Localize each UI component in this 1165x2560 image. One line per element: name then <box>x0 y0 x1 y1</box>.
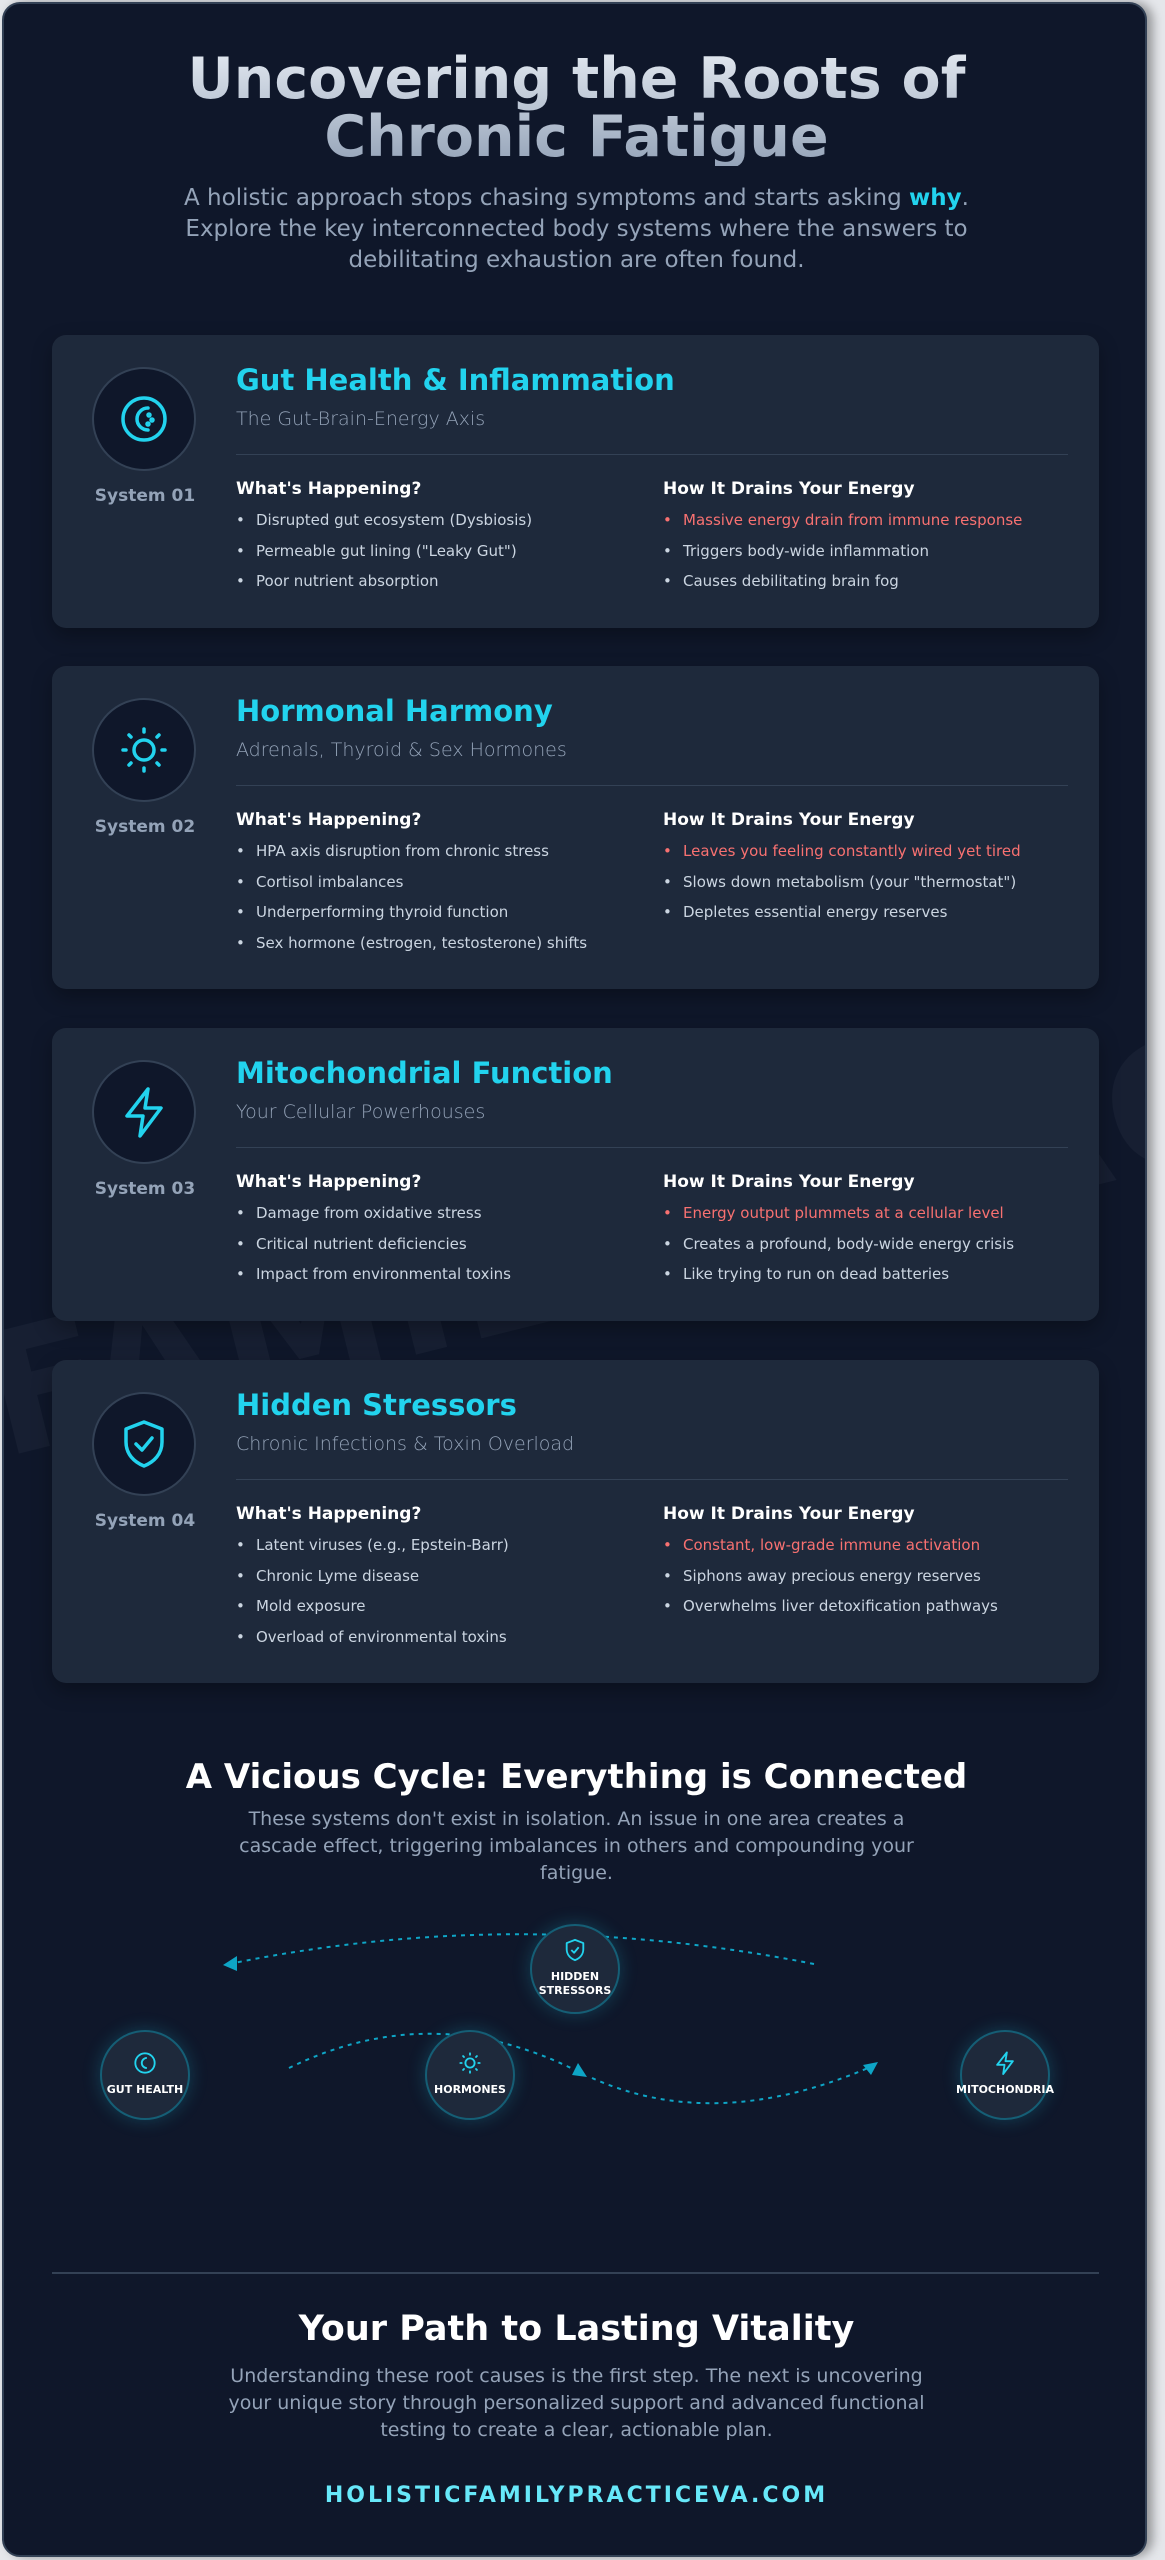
node: hormones: HORMONES <box>434 2083 506 2096</box>
panel: hidden stressors <box>52 1360 1099 1683</box>
node: hidden stressors: HIDDEN <box>551 1970 599 1983</box>
panel: gut health: The Gut-Brain-Energy Axis <box>236 408 485 430</box>
list: what's happening: What's Happening? <box>236 479 421 499</box>
title <box>4 50 1149 166</box>
icon: shield <box>92 1392 196 1496</box>
list: what's happening: Permeable gut lining ("Leaky Gut") <box>256 542 517 560</box>
node: gut health: GUT HEALTH <box>107 2083 183 2096</box>
subtitle: A holistic approach stops chasing symptoms and starts asking why. <box>184 185 969 211</box>
list: what's happening: Cortisol imbalances <box>256 872 403 890</box>
heading: Mitochondrial Function <box>236 1056 613 1090</box>
panel: hormones: System 02 <box>95 817 195 837</box>
title: Uncovering the Roots of <box>187 46 966 112</box>
list: energy drain: Causes debilitating brain fog <box>683 572 899 590</box>
list: what's happening: Damage from oxidative stress <box>256 1204 482 1222</box>
list: energy drain: Massive energy drain from immune response <box>683 511 1022 529</box>
panel: gut health: System 01 <box>95 486 195 506</box>
list: what's happening <box>236 1172 511 1283</box>
list: what's happening: Overload of environmental toxins <box>256 1628 507 1646</box>
subtitle <box>184 185 969 273</box>
node: hidden stressors: STRESSORS <box>539 1984 611 1997</box>
list: what's happening: Latent viruses (e.g., Epstein-Barr) <box>256 1536 509 1554</box>
panel: gut health <box>52 335 1099 628</box>
node: hormones <box>425 2030 515 2120</box>
list: what's happening <box>236 479 532 590</box>
list: what's happening: What's Happening? <box>236 1172 421 1192</box>
list: energy drain: Overwhelms liver detoxification pathways <box>683 1597 998 1615</box>
list: what's happening: Critical nutrient deficiencies <box>256 1234 467 1252</box>
list: energy drain: Depletes essential energy reserves <box>683 903 947 921</box>
heading: Gut Health & Inflammation <box>236 363 675 397</box>
list: energy drain: Leaves you feeling constantly wired yet tired <box>683 842 1021 860</box>
list: energy drain: Like trying to run on dead batteries <box>683 1265 949 1283</box>
list: energy drain: Triggers body-wide inflammation <box>683 542 929 560</box>
list: energy drain: Siphons away precious energy reserves <box>683 1566 981 1584</box>
list: energy drain: Creates a profound, body-wide energy crisis <box>683 1234 1014 1252</box>
panel: mitochondria: System 03 <box>95 1179 195 1199</box>
list: what's happening <box>236 810 587 952</box>
list: what's happening: Impact from environmental toxins <box>256 1265 511 1283</box>
list: energy drain: How It Drains Your Energy <box>663 1504 915 1524</box>
heading: Hidden Stressors <box>236 1388 517 1422</box>
list: energy drain: Energy output plummets at a cellular level <box>683 1204 1004 1222</box>
list: what's happening: Chronic Lyme disease <box>256 1566 419 1584</box>
heading: path to vitality: Your Path to Lasting Vitality <box>299 2309 854 2349</box>
panel: mitochondria: Your Cellular Powerhouses <box>236 1101 485 1123</box>
heading: Hormonal Harmony <box>236 694 553 728</box>
icon: sun <box>92 698 196 802</box>
list: what's happening: Sex hormone (estrogen, testosterone) shifts <box>256 934 587 952</box>
node: gut health <box>100 2030 190 2120</box>
list: what's happening: Mold exposure <box>256 1597 366 1615</box>
title: Chronic Fatigue <box>324 104 829 170</box>
list: what's happening: Underperforming thyroid function <box>256 903 508 921</box>
list: energy drain: Slows down metabolism (your "thermostat") <box>683 872 1016 890</box>
list: what's happening: What's Happening? <box>236 810 421 830</box>
list: energy drain <box>663 810 1021 921</box>
node: mitochondria: MITOCHONDRIA <box>956 2083 1054 2096</box>
panel: hidden stressors: Chronic Infections & Toxin Overload <box>236 1433 574 1455</box>
subtitle: Explore the key interconnected body systems where the answers to <box>185 216 968 242</box>
list: what's happening: HPA axis disruption from chronic stress <box>256 842 549 860</box>
list: what's happening: What's Happening? <box>236 1504 421 1524</box>
icon: bolt <box>92 1060 196 1164</box>
icon: gut <box>92 367 196 471</box>
list: what's happening: Disrupted gut ecosystem (Dysbiosis) <box>256 511 532 529</box>
list: energy drain: How It Drains Your Energy <box>663 479 915 499</box>
list: energy drain <box>663 1504 998 1615</box>
panel: hormones <box>52 666 1099 989</box>
heading: vicious cycle: A Vicious Cycle: Everything is Connected <box>186 1757 967 1797</box>
list: energy drain: How It Drains Your Energy <box>663 1172 915 1192</box>
panel: mitochondria <box>52 1028 1099 1321</box>
node: mitochondria <box>960 2030 1050 2120</box>
text: closing: Understanding these root causes is the first step. The next is uncovering your unique story through personalized support and advanced functional testing to create a clear, actionable plan. <box>228 2365 924 2441</box>
panel: hidden stressors: System 04 <box>95 1511 195 1531</box>
subtitle: debilitating exhaustion are often found. <box>348 247 805 273</box>
text: cycle description: These systems don't exist in isolation. An issue in one area creates a cascade effect, triggering imbalances in others and compounding your fatigue. <box>239 1808 914 1884</box>
list: energy drain <box>663 479 1022 590</box>
list: what's happening <box>236 1504 509 1646</box>
list: energy drain: Constant, low-grade immune activation <box>683 1536 980 1554</box>
list: energy drain <box>663 1172 1014 1283</box>
panel: hormones: Adrenals, Thyroid & Sex Hormones <box>236 739 567 761</box>
list: energy drain: How It Drains Your Energy <box>663 810 915 830</box>
website url: HOLISTICFAMILYPRACTICEVA.COM <box>325 2483 828 2508</box>
node: hidden stressors <box>530 1924 620 2014</box>
list: what's happening: Poor nutrient absorption <box>256 572 439 590</box>
